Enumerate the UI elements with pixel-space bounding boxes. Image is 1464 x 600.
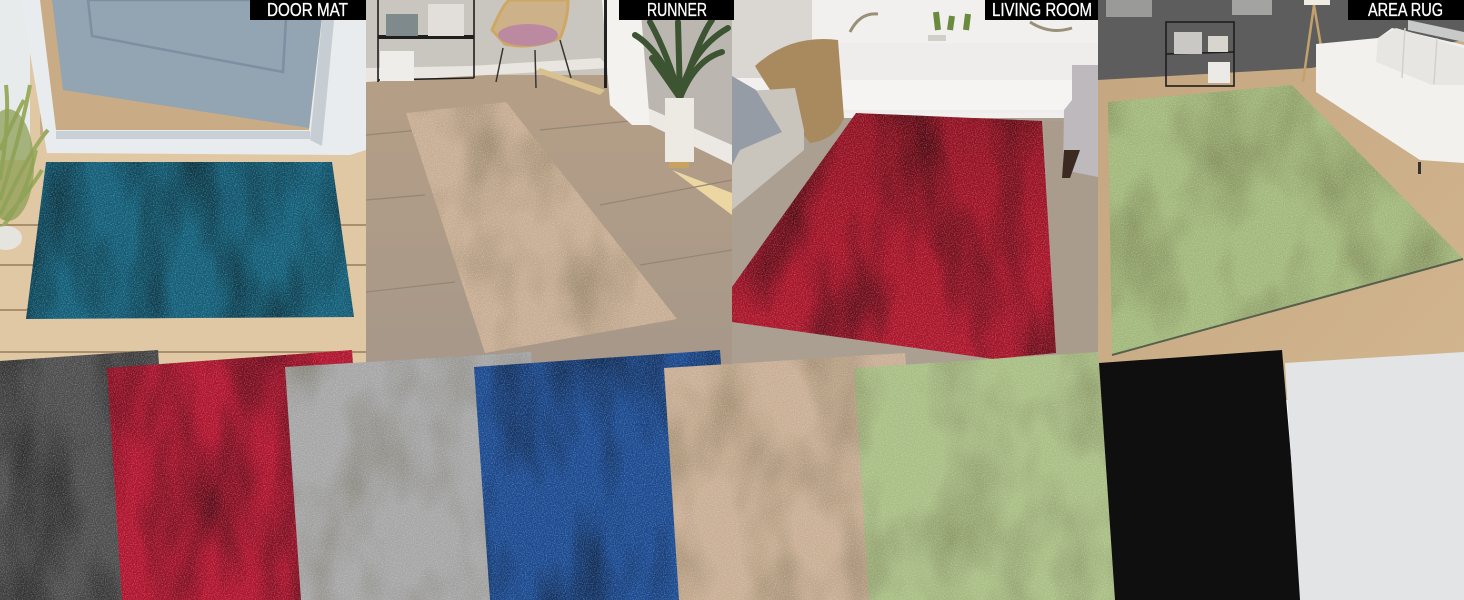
rug bbox=[732, 113, 1056, 359]
door bbox=[52, 0, 324, 128]
curtain bbox=[602, 0, 650, 125]
shelf bbox=[1166, 22, 1234, 86]
panel: runner scene bbox=[366, 0, 732, 400]
sofa bbox=[1316, 28, 1464, 163]
swatch: grey bbox=[285, 352, 550, 600]
swatch: beige bbox=[664, 353, 925, 600]
window sill with plants and sconces bbox=[850, 12, 1072, 41]
wall pictures bbox=[1106, 0, 1152, 17]
armchair bbox=[1063, 65, 1098, 177]
chair bbox=[492, 0, 568, 46]
swatch: green bbox=[854, 352, 1118, 600]
label: door mat: DOOR MAT bbox=[267, 0, 348, 20]
shelf bbox=[378, 0, 474, 82]
label: runner: RUNNER bbox=[647, 0, 707, 20]
swatch: white bbox=[1285, 352, 1464, 600]
floor lamp bbox=[1303, 5, 1325, 82]
panel: area rug scene bbox=[1098, 0, 1464, 400]
swatch: charcoal bbox=[0, 350, 175, 600]
panel: door mat scene bbox=[0, 0, 366, 400]
mat bbox=[26, 162, 354, 319]
basket bbox=[755, 39, 844, 143]
colour swatches bbox=[0, 350, 1464, 600]
door frame bbox=[21, 0, 366, 155]
plant bbox=[0, 85, 48, 230]
swatch: red bbox=[107, 350, 370, 600]
sofa bbox=[732, 88, 804, 210]
swatch: black bbox=[1099, 350, 1303, 600]
swatch: blue bbox=[474, 350, 738, 600]
panel: living room scene bbox=[732, 0, 1098, 400]
label: runner bbox=[619, 0, 734, 20]
rug bbox=[1108, 85, 1463, 355]
label: living room: LIVING ROOM bbox=[992, 0, 1092, 20]
runner rug bbox=[406, 102, 677, 353]
label: area rug: AREA RUG bbox=[1368, 0, 1443, 20]
plant bbox=[635, 20, 728, 98]
